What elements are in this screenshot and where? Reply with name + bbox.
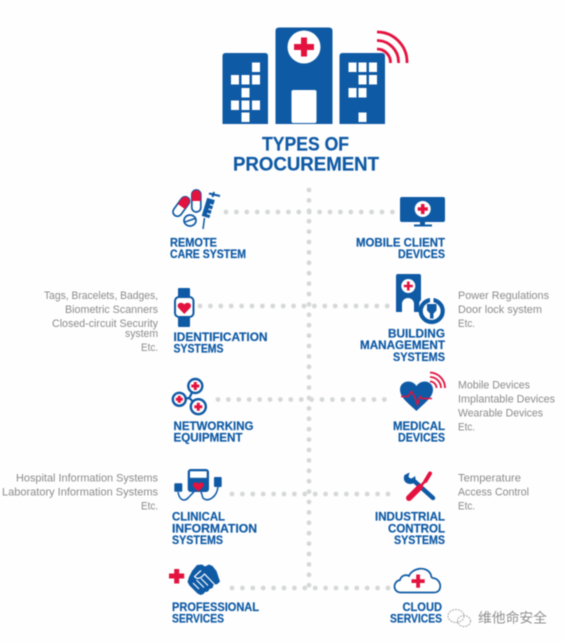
label: SYSTEMS bbox=[393, 350, 445, 364]
text: medical examples bbox=[458, 380, 556, 434]
label: IDENTIFICATION bbox=[174, 330, 268, 344]
label: CARE SYSTEM bbox=[170, 247, 246, 261]
text: clinical examples bbox=[2, 472, 159, 512]
label: DEVICES bbox=[398, 430, 445, 444]
panel: networking equipment bbox=[173, 379, 254, 444]
text: building examples: Etc. bbox=[458, 318, 475, 330]
text: industrial examples: Access Control bbox=[458, 486, 529, 498]
title: PROCUREMENT bbox=[233, 154, 379, 176]
label: INFORMATION bbox=[172, 521, 257, 535]
panel: remote care system bbox=[170, 190, 246, 261]
label: REMOTE bbox=[170, 236, 217, 250]
icon: smartwatch with heart bbox=[175, 288, 194, 327]
label: SERVICES bbox=[390, 612, 442, 626]
label bbox=[390, 600, 442, 626]
text: identification examples: Closed-circuit Security bbox=[52, 318, 159, 330]
label bbox=[360, 326, 446, 364]
icon: chat bubbles bbox=[448, 610, 470, 626]
text: building examples: Power Regulations bbox=[458, 290, 550, 302]
label: MOBILE CLIENT bbox=[356, 236, 446, 250]
label bbox=[375, 510, 446, 547]
label: MEDICAL bbox=[393, 419, 446, 433]
title bbox=[233, 134, 379, 176]
text: medical examples: Mobile Devices bbox=[458, 380, 531, 392]
text: identification examples: Tags, Bracelets, Badges, bbox=[44, 290, 158, 302]
panel: medical devices bbox=[393, 372, 556, 444]
text: industrial examples: Etc. bbox=[458, 500, 475, 512]
watermark bbox=[448, 610, 547, 626]
icon: heart with pulse and signal bbox=[400, 372, 445, 411]
label: INDUSTRIAL bbox=[375, 510, 446, 524]
label: CONTROL bbox=[388, 521, 446, 535]
text: clinical examples: Etc. bbox=[141, 500, 158, 512]
text: clinical examples: Hospital Information Systems bbox=[16, 472, 159, 484]
label: SYSTEMS bbox=[174, 342, 224, 356]
label bbox=[174, 419, 254, 444]
panel: identification systems bbox=[44, 288, 268, 356]
label: BUILDING bbox=[388, 326, 445, 340]
icon: wrench and screwdriver bbox=[404, 472, 433, 498]
panel: industrial control systems bbox=[375, 472, 529, 547]
label: CLINICAL bbox=[172, 510, 226, 524]
label bbox=[393, 419, 446, 444]
label bbox=[356, 236, 446, 261]
text: industrial examples bbox=[458, 472, 529, 512]
label: EQUIPMENT bbox=[174, 430, 243, 444]
label: SYSTEMS bbox=[394, 533, 445, 547]
watermark: 维他命安全 bbox=[478, 610, 547, 626]
title: TYPES OF bbox=[262, 134, 349, 156]
text: medical examples: Wearable Devices bbox=[458, 408, 544, 420]
panel: professional services bbox=[169, 564, 260, 626]
icon: cloud with cross bbox=[394, 569, 440, 592]
label: CLOUD bbox=[402, 600, 442, 614]
panel: cloud services bbox=[390, 569, 442, 626]
text: clinical examples: Laboratory Information Systems bbox=[2, 486, 159, 498]
label bbox=[170, 236, 246, 261]
text: medical examples: Implantable Devices bbox=[458, 394, 556, 406]
text: building examples: Door lock system bbox=[458, 304, 542, 316]
label: PROFESSIONAL bbox=[172, 600, 260, 614]
panel: clinical information systems bbox=[2, 469, 257, 547]
label bbox=[172, 600, 260, 626]
text: industrial examples: Temperature bbox=[458, 472, 521, 484]
icon: connected nodes bbox=[173, 379, 206, 414]
icon: clinical monitor device bbox=[174, 469, 222, 500]
icon: hospital buildings bbox=[222, 28, 407, 124]
panel: mobile client devices bbox=[356, 197, 446, 261]
text: identification examples: Biometric Scanners bbox=[65, 304, 159, 316]
label: NETWORKING bbox=[174, 419, 254, 433]
icon: plus and handshake bbox=[169, 564, 220, 595]
label: DEVICES bbox=[398, 247, 445, 261]
label: SYSTEMS bbox=[172, 533, 223, 547]
text: building examples bbox=[458, 290, 550, 330]
label: SERVICES bbox=[172, 612, 224, 626]
text: identification examples: Etc. bbox=[141, 342, 158, 354]
panel: building management systems bbox=[360, 274, 550, 364]
text: medical examples: Etc. bbox=[458, 422, 475, 434]
label bbox=[174, 330, 268, 356]
text: identification examples bbox=[44, 290, 159, 354]
text: identification examples: system bbox=[125, 328, 158, 340]
label bbox=[172, 510, 257, 547]
icon: building and plug bbox=[396, 274, 443, 322]
label: MANAGEMENT bbox=[360, 338, 446, 352]
icon: monitor bbox=[400, 197, 445, 226]
icon: pills and syringe bbox=[171, 190, 220, 229]
